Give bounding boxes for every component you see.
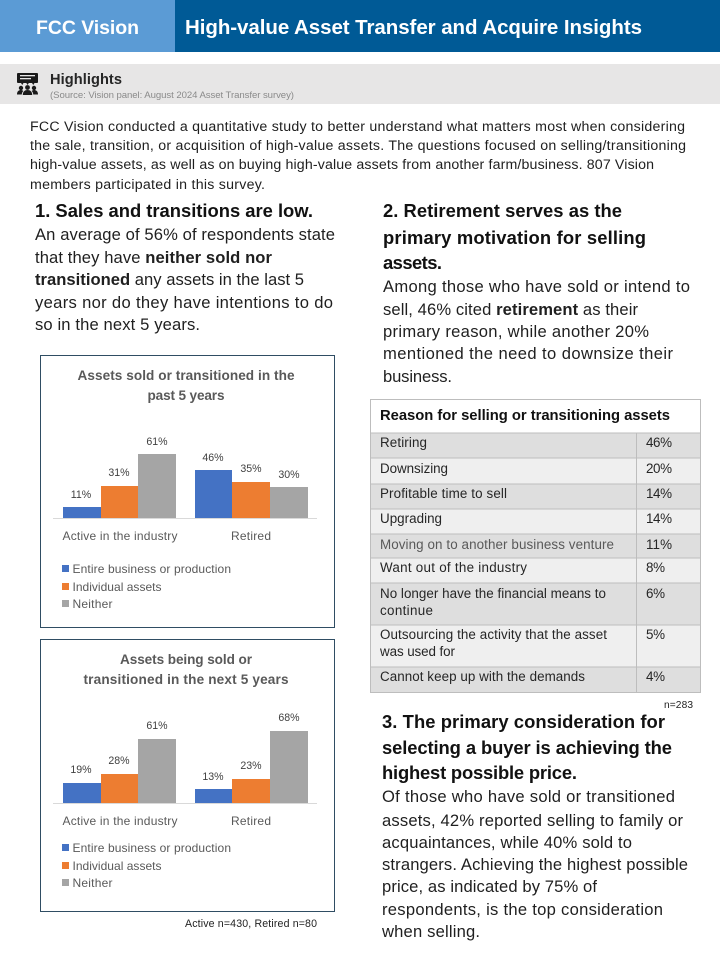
table rows: 4% [646,669,665,684]
data labels: 31% [108,467,130,479]
intro text: the sale, transition, or acquisition of high-value assets. The questions focused on selling/transitioning [30,138,686,154]
intro text: high-value assets, as well as on buying high-value assets from another farm/business. 807 Vision [30,157,654,173]
section 1 text [35,200,335,334]
section 1 body: so in the next 5 years. [35,315,200,334]
section 3 body: assets, 42% reported selling to family or [382,811,683,830]
bars: retired [195,731,308,803]
icon: presenter and audience [17,73,38,95]
data labels: 30% [278,469,300,481]
table rows: Cannot keep up with the demands [380,669,585,684]
legend: Neither [72,876,112,890]
chart sample size note: Active n=430, Retired n=80 [185,918,317,930]
section 3 body: strangers. Achieving the highest possible [382,855,688,874]
table rows: Want out of the industry [380,560,527,575]
table rows: 11% [646,537,672,552]
bars: active in the industry [63,739,176,803]
axis labels: Active in the industry [62,814,178,828]
chart: assets sold or transitioned in the past 5 years [40,356,334,628]
table rows [379,435,672,684]
section 2 body: sell, 46% cited retirement as their [383,300,638,319]
bars: active in the industry [63,454,176,518]
legend: Individual assets [72,580,162,594]
section 1 body: years nor do they have intentions to do [35,293,333,312]
legend [62,562,231,611]
data labels: 46% [202,452,224,464]
section 2 body [383,277,690,386]
table sample size note: n=283 [664,700,693,711]
axis labels: Retired [231,529,271,543]
section 1 body: that they have neither sold nor [35,248,273,267]
data labels: 61% [146,720,168,732]
legend: Individual assets [72,859,162,873]
highlights band [0,64,720,104]
section 2 body: primary reason, while another 20% [383,322,649,341]
section 3 text [381,711,688,941]
section 1 body [35,225,335,334]
data labels: 13% [202,771,224,783]
section 2 text [383,200,690,386]
axis labels [62,814,271,828]
data labels [71,436,300,501]
table rows: 46% [646,435,672,450]
data labels: 23% [240,760,262,772]
intro text [30,119,686,193]
section 3 body: Of those who have sold or transitioned [382,787,675,806]
chart title: Assets being sold or [120,652,253,667]
section 1 body: An average of 56% of respondents state [35,225,335,244]
section 1 body: transitioned any assets in the last 5 [35,270,304,289]
table rows: Upgrading [380,511,442,526]
table rows: 14% [646,486,672,501]
section 3 body: acquaintances, while 40% sold to [382,833,632,852]
table rows: Profitable time to sell [380,486,507,501]
chart title [78,368,295,403]
section 3 heading: 3. The primary consideration for [382,711,665,732]
table: reason for selling or transitioning assets [370,399,700,692]
brand title: FCC Vision [36,17,139,39]
data labels: 61% [146,436,168,448]
axis labels [62,529,271,543]
table heading: Reason for selling or transitioning assets [380,408,670,424]
chart title: past 5 years [148,388,224,403]
legend: Entire business or production [72,562,231,576]
table rows: continue [380,603,433,618]
intro text: members participated in this survey. [30,177,265,193]
table rows: 14% [646,511,672,526]
data labels: 35% [240,463,262,475]
chart title: Assets sold or transitioned in the [78,368,295,383]
chart title [84,652,288,687]
section 3 body: when selling. [381,922,480,941]
table rows: 5% [646,627,665,642]
data labels [70,712,300,783]
section 3 body: respondents, is the top consideration [382,900,663,919]
section 3 heading: selecting a buyer is achieving the [382,737,672,758]
data labels: 19% [70,764,92,776]
section 3 heading [382,711,672,783]
table rows: Retiring [380,435,427,450]
legend: Neither [72,597,112,611]
section 2 heading: primary motivation for selling [383,227,646,248]
section 3 body [381,787,688,941]
section 2 heading: assets. [383,252,442,273]
data labels: 68% [278,712,300,724]
data labels: 28% [108,755,130,767]
source note: (Source: Vision panel: August 2024 Asset Transfer survey) [50,90,294,101]
table rows: Downsizing [380,461,448,476]
table rows: 20% [646,461,672,476]
table rows: No longer have the financial means to [380,586,606,601]
intro text: FCC Vision conducted a quantitative study to better understand what matters most when considering [30,119,685,135]
section 2 heading: 2. Retirement serves as the [383,200,622,221]
section 2 heading [383,200,646,273]
table rows: Outsourcing the activity that the asset [380,627,607,642]
table rows: Moving on to another business venture [380,537,614,552]
legend: Entire business or production [72,841,231,855]
main title: High-value Asset Transfer and Acquire Insights [185,16,642,39]
chart: assets being sold or transitioned in the next 5 years [40,640,334,912]
section 3 heading: highest possible price. [382,762,577,783]
bars: retired [195,470,308,518]
section 1 heading: 1. Sales and transitions are low. [35,200,313,221]
header banner [0,0,720,52]
table rows: 8% [646,560,665,575]
axis labels: Retired [231,814,271,828]
chart title: transitioned in the next 5 years [84,672,288,687]
section 3 body: price, as indicated by 75% of [382,877,597,896]
legend [62,841,231,890]
data labels: 11% [71,489,92,501]
axis labels: Active in the industry [62,529,178,543]
table rows: 6% [646,586,665,601]
section 2 body: Among those who have sold or intend to [383,277,690,296]
highlights heading: Highlights [50,72,122,88]
section 2 body: mentioned the need to downsize their [383,344,673,363]
table rows: was used for [379,644,456,659]
section 2 body: business. [383,367,452,386]
